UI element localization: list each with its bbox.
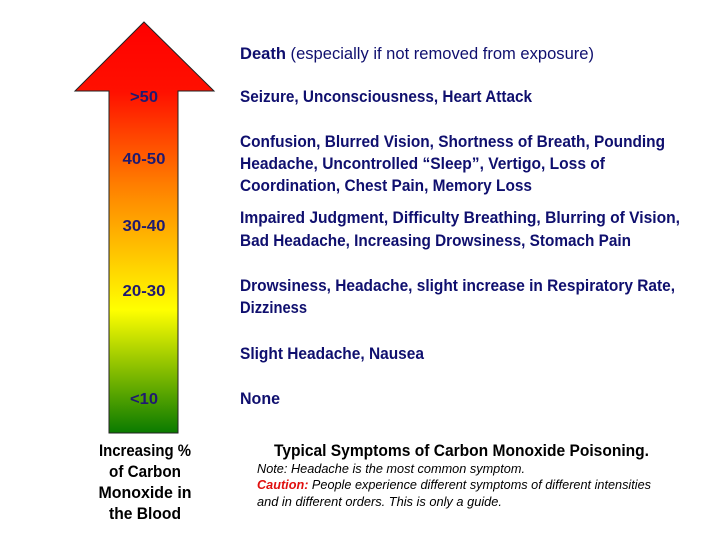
note: Note: Headache is the most common symptom. (257, 462, 525, 476)
arrow: increasing CO percentage (75, 22, 214, 433)
label: 40-50: 40-50 (122, 151, 166, 168)
caution (257, 478, 651, 509)
axis caption: Monoxide in (98, 484, 192, 502)
symptom: confusion: Coordination, Chest Pain, Memory Loss (240, 177, 532, 195)
caution: Caution: People experience different symptoms of different intensities (257, 478, 651, 492)
symptom: drowsiness (240, 277, 675, 317)
symptom: drowsiness: Dizziness (240, 299, 307, 317)
symptom: death: Death (especially if not removed from exposure) (240, 45, 594, 63)
label: 30-40: 30-40 (122, 218, 166, 235)
axis caption: of Carbon (109, 463, 181, 481)
axis caption: the Blood (109, 505, 181, 523)
axis caption: Increasing % (99, 442, 191, 460)
symptom: none: None (240, 390, 280, 408)
axis caption (98, 442, 192, 523)
chart title: Typical Symptoms of Carbon Monoxide Poisoning. (274, 441, 649, 460)
symptom: impaired judgment: Impaired Judgment, Difficulty Breathing, Blurring of Vision, (240, 209, 680, 227)
symptom: confusion (240, 133, 665, 195)
caution: and in different orders. This is only a guide. (257, 495, 502, 509)
label: 20-30: 20-30 (122, 283, 166, 300)
symptom: drowsiness: Drowsiness, Headache, slight increase in Respiratory Rate, (240, 277, 675, 295)
symptom: impaired judgment (240, 209, 680, 250)
symptom: confusion: Confusion, Blurred Vision, Shortness of Breath, Pounding (240, 133, 665, 151)
label: >50: >50 (130, 89, 158, 106)
label: <10: <10 (130, 391, 158, 408)
symptom: confusion: Headache, Uncontrolled “Sleep”, Vertigo, Loss of (240, 155, 605, 173)
symptom: slight headache: Slight Headache, Nausea (240, 345, 425, 363)
symptom: seizure: Seizure, Unconsciousness, Heart Attack (240, 88, 533, 106)
symptom: impaired judgment: Bad Headache, Increasing Drowsiness, Stomach Pain (240, 232, 631, 250)
